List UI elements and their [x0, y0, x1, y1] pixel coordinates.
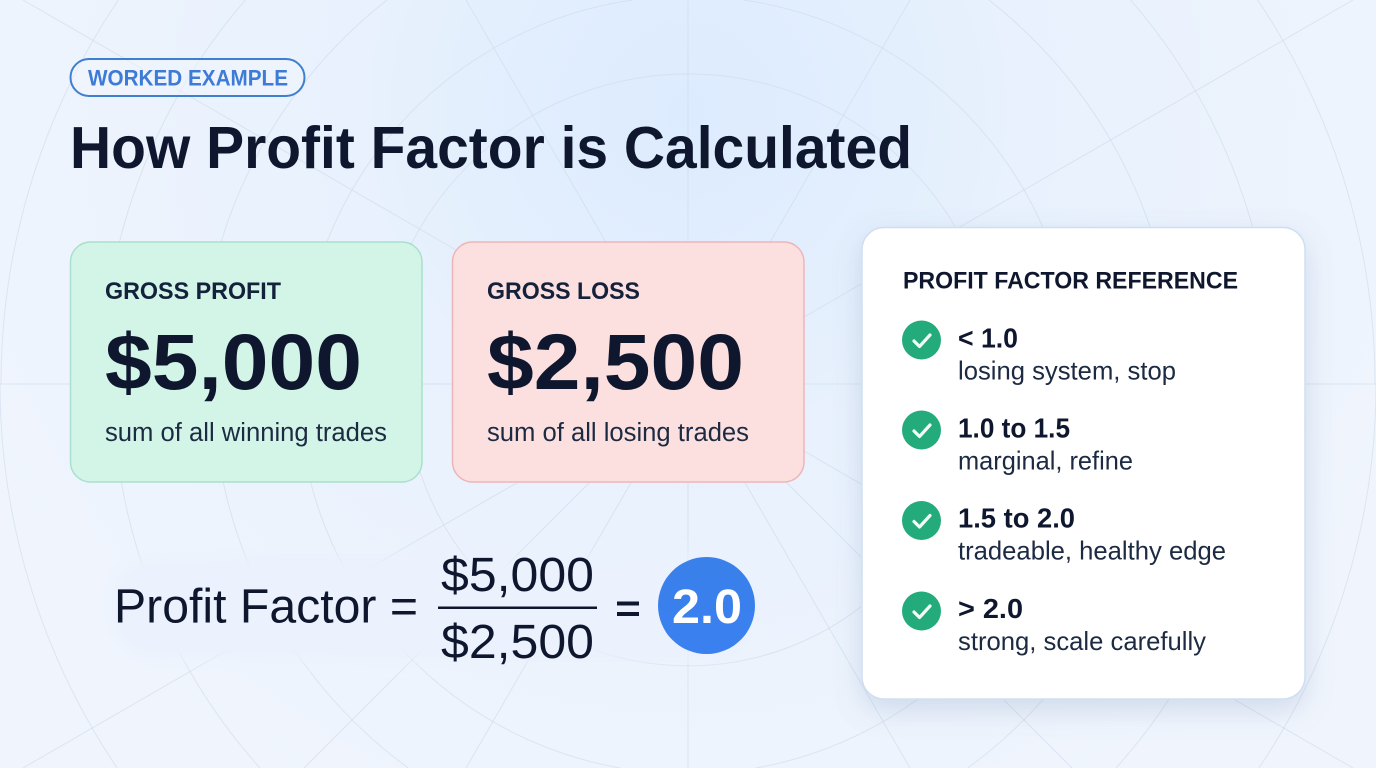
item: below 1.0: losing system, stop — [958, 356, 1176, 386]
badge: worked example: WORKED EXAMPLE — [88, 66, 288, 90]
formula: Profit Factor = — [114, 580, 418, 634]
item: above 2.0 — [902, 592, 1206, 656]
formula — [114, 549, 639, 669]
item: 1.0 to 1.5 — [902, 410, 1133, 476]
badge: worked example — [70, 59, 304, 96]
fraction numerator: $5,000 — [441, 549, 594, 602]
result badge — [658, 557, 755, 654]
item: 1.5 to 2.0: 1.5 to 2.0 — [958, 502, 1075, 534]
item: 1.5 to 2.0 — [902, 501, 1226, 566]
equals sign — [617, 602, 639, 616]
gross profit label: GROSS PROFIT — [105, 278, 281, 305]
reference heading: PROFIT FACTOR REFERENCE — [903, 268, 1238, 294]
item: 1.5 to 2.0: tradeable, healthy edge — [958, 536, 1226, 566]
gross profit value: $5,000 — [105, 317, 362, 406]
item: 1.0 to 1.5: 1.0 to 1.5 — [958, 412, 1070, 444]
panel: gross loss — [452, 242, 804, 482]
title: How Profit Factor is Calculated — [70, 115, 912, 181]
fraction denominator: $2,500 — [441, 616, 594, 669]
item: above 2.0: strong, scale carefully — [958, 626, 1206, 656]
gross profit caption: sum of all winning trades — [105, 419, 387, 447]
gross loss value: $2,500 — [487, 317, 744, 406]
item: 1.0 to 1.5: marginal, refine — [958, 446, 1133, 476]
item: above 2.0: > 2.0 — [958, 593, 1023, 624]
panel: profit factor reference — [862, 228, 1305, 699]
item: below 1.0 — [902, 320, 1176, 386]
result badge: 2.0 — [672, 581, 742, 634]
gross loss label: GROSS LOSS — [487, 278, 640, 305]
item: below 1.0: < 1.0 — [958, 322, 1018, 354]
panel: gross profit — [70, 242, 422, 482]
gross loss caption: sum of all losing trades — [487, 419, 749, 447]
